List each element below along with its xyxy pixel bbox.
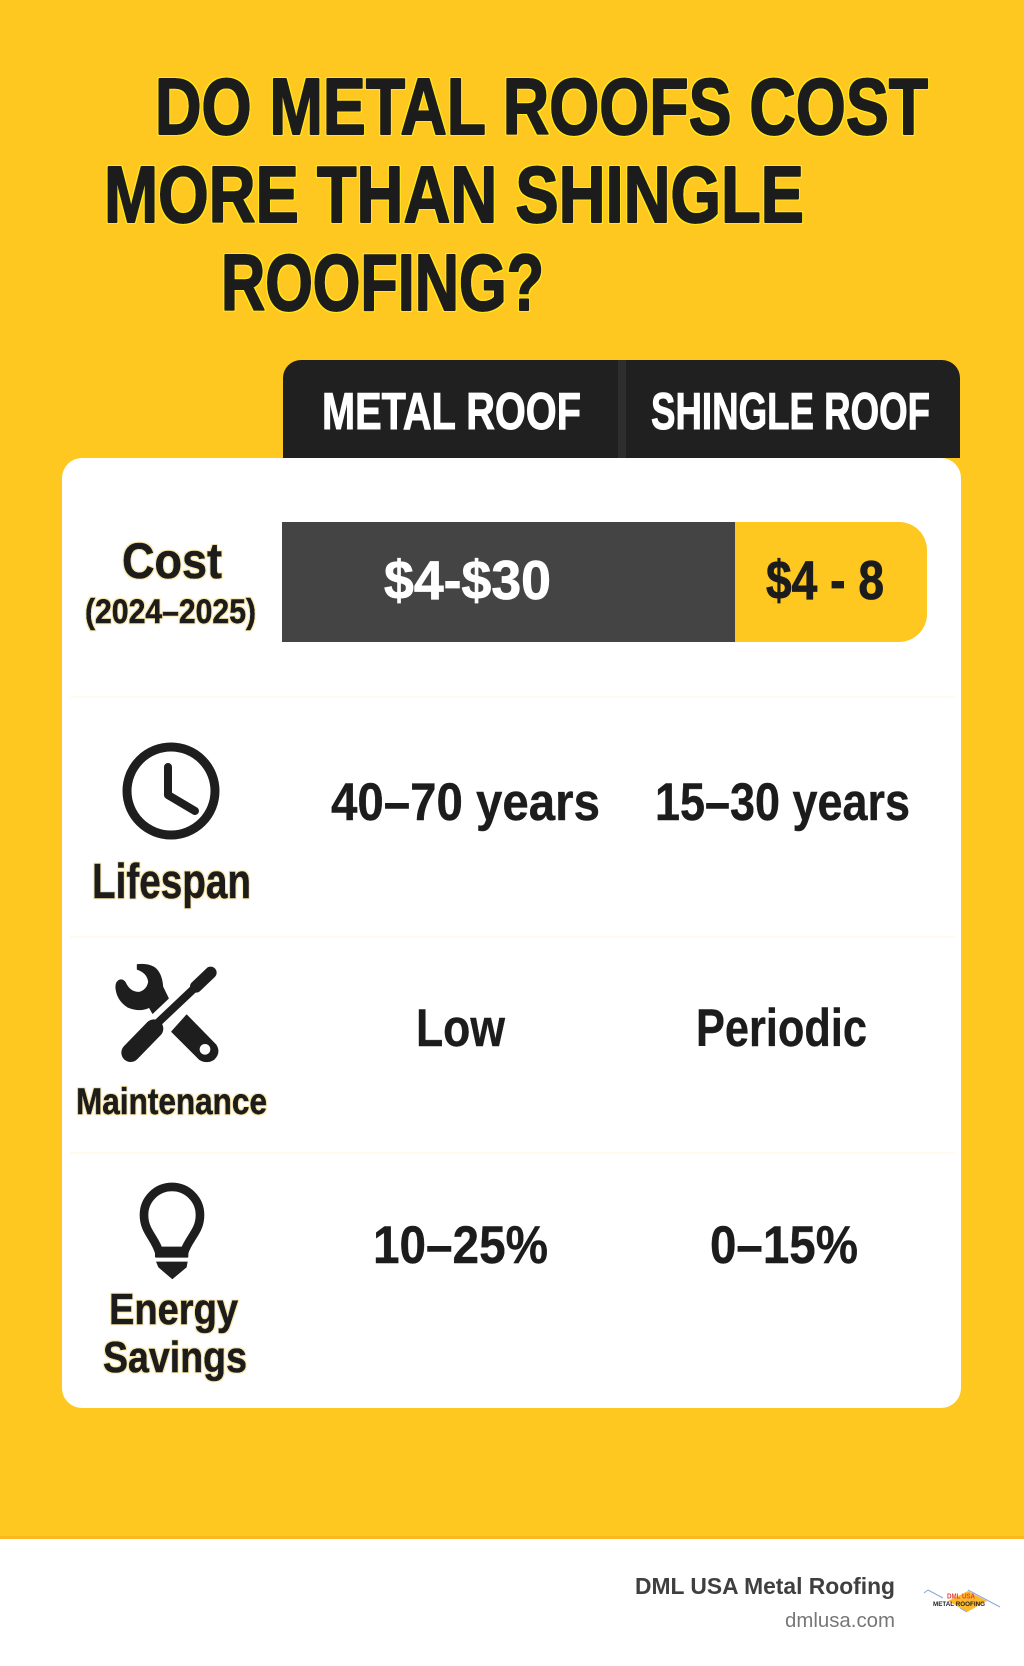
row label: lifespan: Lifespan [92, 855, 251, 909]
shingle maintenance: Periodic [696, 999, 867, 1058]
row label: energy savings: Energy [109, 1285, 238, 1334]
logo: DML USA [947, 1594, 975, 1600]
footer [0, 1536, 1024, 1666]
title: ROOFING? [221, 238, 544, 327]
icon: clock [127, 747, 215, 835]
panel: comparison table [62, 458, 961, 1408]
shingle roof cost: $4 - 8 [766, 549, 884, 611]
title [104, 62, 928, 327]
title: MORE THAN SHINGLE [104, 150, 804, 239]
icon: wrench and screwdriver [116, 964, 218, 1062]
metal energy savings: 10–25% [373, 1216, 548, 1275]
brand name: DML USA Metal Roofing [635, 1573, 895, 1599]
cost bar [282, 522, 927, 642]
row label: energy savings [103, 1285, 247, 1382]
logo: METAL ROOFING [933, 1601, 985, 1608]
row label: cost [85, 533, 256, 631]
table header [283, 360, 960, 458]
row label: cost: Cost [122, 533, 222, 589]
metal roof cost: $4-$30 [384, 549, 551, 611]
website: dmlusa.com [785, 1610, 895, 1632]
metal maintenance: Low [416, 999, 506, 1058]
column heading: metal roof: METAL ROOF [322, 383, 581, 441]
shingle lifespan: 15–30 years [655, 773, 910, 832]
shingle energy savings: 0–15% [710, 1216, 858, 1275]
icon: light bulb [144, 1187, 200, 1279]
row label: maintenance: Maintenance [76, 1081, 267, 1122]
metal lifespan: 40–70 years [331, 773, 600, 832]
logo [924, 1590, 1000, 1612]
row label: energy savings: Savings [103, 1333, 247, 1382]
row label: cost: (2024–2025) [85, 593, 256, 631]
